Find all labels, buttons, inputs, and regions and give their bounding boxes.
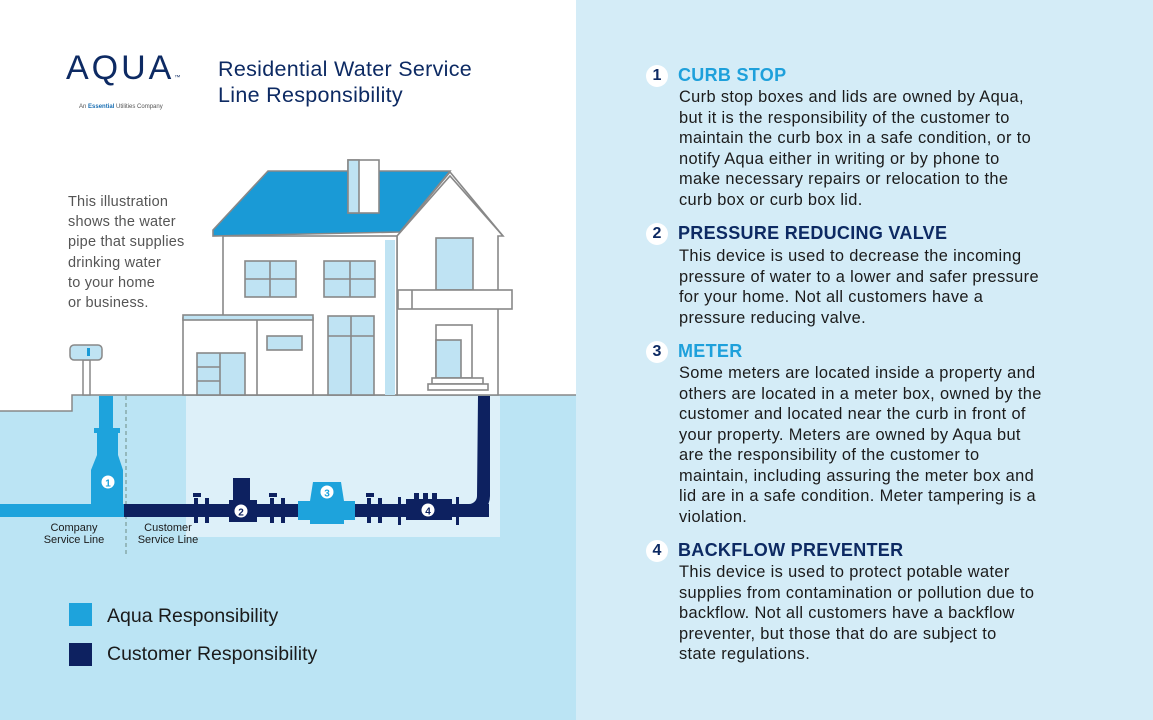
item 2: This device is used to decrease the incoming (679, 247, 1021, 265)
customer pipe (124, 396, 490, 525)
logo: AQUA™ (66, 49, 183, 87)
device 3 meter (298, 482, 355, 524)
right panel (576, 0, 1153, 720)
title: Residential Water Service (218, 57, 472, 81)
logo (66, 49, 183, 110)
item 4: This device is used to protect potable water (679, 563, 1010, 581)
item 3: lid are in a safe condition. Meter tampering is a (679, 487, 1036, 505)
item 1: curb box or curb box lid. (679, 190, 863, 208)
item 1: but it is the responsibility of the customer to (679, 108, 1010, 126)
title: Line Responsibility (218, 83, 403, 107)
item 2 (646, 223, 1039, 326)
item 1: Curb stop boxes and lids are owned by Aqua, (679, 88, 1024, 106)
legend (69, 603, 318, 666)
item 3: maintain, including assuring the meter box and (679, 466, 1034, 484)
item 4: backflow. Not all customers have a backflow (679, 604, 1015, 622)
legend: Aqua Responsibility (107, 605, 278, 627)
item 1 (646, 65, 1031, 208)
item 2: for your home. Not all customers have a (679, 288, 983, 306)
item 4 (646, 540, 1034, 663)
item 1: make necessary repairs or relocation to the (679, 170, 1008, 188)
company pipe: 1 (105, 478, 111, 490)
item 4: BACKFLOW PREVENTER (678, 540, 903, 560)
dashed divider (125, 396, 127, 555)
device 4 (422, 504, 434, 518)
item 3: others are located in a meter box, owned by the (679, 384, 1042, 402)
item 1: CURB STOP (678, 65, 786, 85)
item 3: Some meters are located inside a property and (679, 364, 1036, 382)
labels (44, 522, 198, 546)
item 3: METER (678, 341, 742, 361)
device 2: 2 (238, 508, 244, 518)
item 1: maintain the curb box in a safe condition, or to (679, 129, 1031, 147)
device 3 meter: 3 (324, 488, 330, 500)
mailbox (70, 345, 102, 395)
item 2: PRESSURE REDUCING VALVE (678, 223, 947, 243)
intro text: or business. (68, 295, 149, 311)
item 1: notify Aqua either in writing or by phone to (679, 150, 1000, 168)
ground (0, 395, 576, 720)
intro text: This illustration (68, 194, 168, 210)
intro text (68, 194, 184, 311)
item 2: 2 (653, 225, 661, 242)
intro text: to your home (68, 275, 155, 291)
item 3: violation. (679, 508, 747, 526)
item 2: pressure reducing valve. (679, 308, 866, 326)
title (218, 57, 472, 107)
item 4: 4 (653, 542, 661, 559)
labels: Customer (144, 522, 192, 534)
item 2: pressure of water to a lower and safer pressure (679, 268, 1039, 286)
intro text: pipe that supplies (68, 234, 184, 250)
item 3: customer and located near the curb in front of (679, 405, 1026, 423)
house (183, 160, 512, 395)
legend: Customer Responsibility (107, 643, 317, 665)
labels: Service Line (138, 534, 198, 546)
item 4: preventer, but those that do are subject to (679, 624, 997, 642)
illustration (0, 159, 576, 720)
labels: Company (50, 522, 98, 534)
item 3: 3 (653, 343, 661, 360)
device 4: 4 (425, 506, 431, 518)
intro text: shows the water (68, 214, 176, 230)
item 4: state regulations. (679, 645, 810, 663)
logo: An Essential Utilities Company (79, 104, 163, 110)
item 3: your property. Meters are owned by Aqua but (679, 426, 1021, 444)
item 4: supplies from contamination or pollution due to (679, 584, 1034, 602)
item 1: 1 (653, 67, 661, 84)
item 3: are the responsibility of the customer to (679, 446, 979, 464)
item 3 (646, 341, 1042, 526)
labels: Service Line (44, 534, 104, 546)
device 2 (234, 504, 248, 518)
intro text: drinking water (68, 255, 161, 271)
company pipe (0, 396, 124, 517)
